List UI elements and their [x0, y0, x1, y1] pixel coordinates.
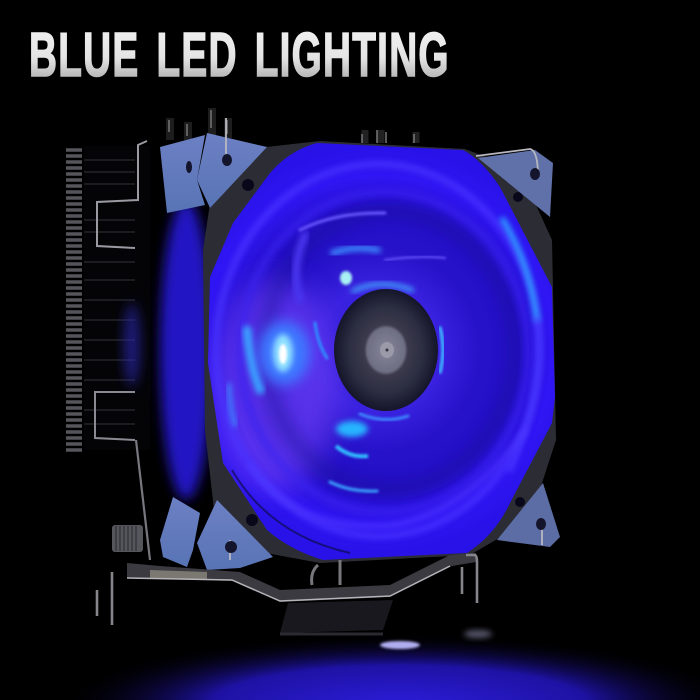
fan frame: [203, 141, 556, 563]
rear fan glow: [160, 200, 212, 500]
dark ring: [265, 210, 515, 490]
front corner pads: [197, 133, 560, 570]
purple glow: [213, 280, 337, 490]
inner frame curve: [232, 470, 350, 553]
bright mid ring: [240, 192, 528, 512]
base mounting bracket: [97, 525, 477, 634]
retention clip upper: [97, 141, 147, 248]
floor reflection: [60, 630, 700, 700]
retention clip lower: [95, 392, 135, 440]
fan hub: [334, 289, 438, 411]
bright outer ring: [216, 164, 540, 536]
heat pipes: [169, 108, 416, 143]
blade arcs: [229, 213, 538, 526]
bracket posts: [97, 555, 477, 625]
LED highlights: [258, 271, 368, 456]
pad mounting holes: [186, 154, 546, 553]
fan blue glow: [208, 143, 555, 560]
fin edge stripes: [66, 150, 82, 450]
mounting wire clips: [226, 118, 542, 560]
frame mounting holes: [242, 179, 525, 526]
adjustment knob: [112, 525, 143, 552]
title: BLUE LED LIGHTING: [29, 20, 450, 89]
fin inner lines: [84, 160, 135, 424]
heatsink fin stack: [66, 141, 150, 560]
rear corner pads: [160, 135, 205, 567]
